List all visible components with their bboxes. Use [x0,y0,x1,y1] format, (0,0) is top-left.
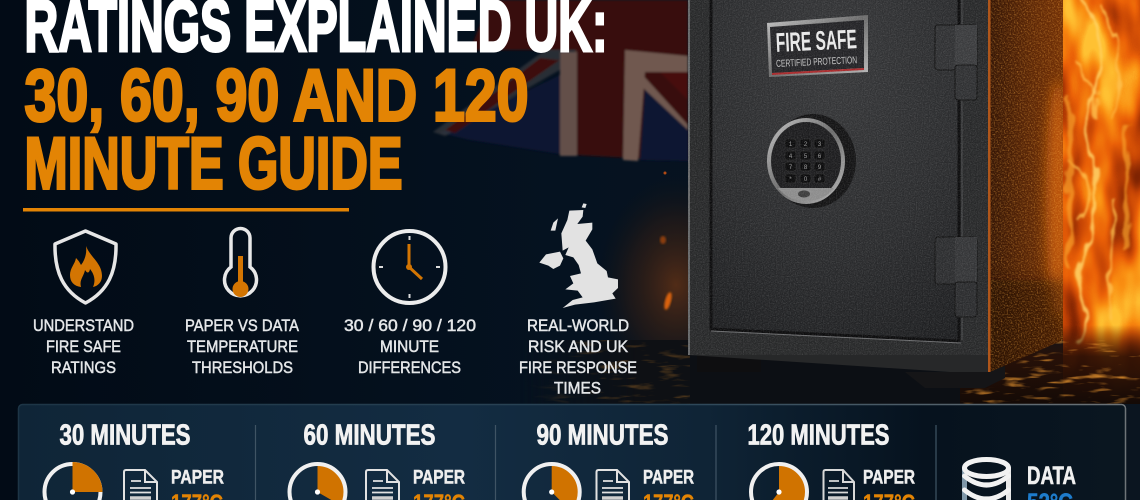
title [24,0,608,204]
keypad digits: # [818,177,822,183]
data threshold [964,460,1076,500]
safe side face [988,0,1070,375]
paper label: PAPER [863,468,915,488]
background: ember floor right of safe [960,325,1140,404]
pie [751,464,807,500]
top hinge [935,25,977,100]
feature label: understand fire safe ratings: FIRE SAFE [46,337,121,356]
data label: DATA [1027,462,1076,490]
safe [688,0,1070,388]
feature label: understand fire safe ratings [33,316,134,377]
icon: clock [374,231,446,303]
background: union flag [433,0,688,161]
paper label: PAPER [171,468,224,488]
background: ember glow behind safe [596,172,756,395]
fire safe badge [767,15,868,77]
paper icon [124,470,157,500]
keypad digits: 5 [804,154,808,160]
panel: rating comparison strip [18,404,1126,500]
feature label: paper vs data temperature thresholds: TEMPERATURE [187,337,298,356]
safe feet [697,354,1005,388]
keypad digits: 2 [804,142,808,148]
feature label: real-world risk [519,316,637,398]
feature label: minute differences: DIFFERENCES [358,358,461,377]
feature label: understand fire safe ratings: RATINGS [51,358,116,377]
paper icon [596,470,629,500]
feature label: understand fire safe ratings: UNDERSTAND [33,316,134,335]
feature label: minute differences: 30 / 60 / 90 / 120 [344,316,476,335]
bottom hinge [935,237,977,317]
icon: thermometer [225,228,256,297]
keypad digits: 0 [804,177,808,183]
badge title: FIRE SAFE [775,24,857,58]
pie [524,464,580,500]
paper icon [366,470,399,500]
background: dark floor left of safe [542,340,960,404]
feature label: paper vs data temperature thresholds: PAPER VS DATA [185,316,300,335]
safe door [712,0,958,340]
keypad digits: 6 [818,154,822,160]
feature label: real-world risk: RISK AND UK [528,337,629,356]
safe door grooves [689,0,962,355]
keypad digits: 4 [789,154,793,160]
feature label: minute differences: MINUTE [380,337,439,356]
keypad digits [789,142,822,183]
pie [44,462,102,500]
safe body frame [688,0,988,372]
keypad digits: 7 [789,165,793,171]
paper label: PAPER [643,468,694,488]
title line 2: 30, 60, 90 AND 120 [24,54,528,136]
feature label: real-world risk: FIRE RESPONSE [519,358,637,377]
rating: 120 minutes [748,420,915,500]
heading: 90 MINUTES [536,420,668,452]
paper label: PAPER [413,468,465,488]
title underline [23,208,349,212]
keypad digits: 3 [818,142,822,148]
rating: 60 minutes [290,420,465,500]
feature label: real-world risk: TIMES [554,378,601,398]
rating: 90 minutes [524,420,694,500]
keypad digits: 9 [818,165,822,171]
badge subtitle: CERTIFIED PROTECTION [776,55,857,70]
pie [290,464,346,500]
heading: 120 MINUTES [748,420,890,452]
feature label: minute differences [344,316,476,377]
icon: shield with flame [55,231,116,303]
safe grain overlay [688,0,988,355]
fire on right of safe [1063,0,1140,400]
feature label: paper vs data temperature thresholds [185,316,300,377]
icon: UK map [539,203,618,308]
title line 3: MINUTE GUIDE [24,122,403,204]
paper icon [824,470,854,500]
keypad digits: 1 [789,142,793,148]
heading: 30 MINUTES [60,420,190,452]
heading: 60 MINUTES [304,420,436,452]
feature label: real-world risk: REAL-WORLD [527,316,629,335]
feature label: paper vs data temperature thresholds: THRESHOLDS [192,358,293,377]
keypad digits: 8 [804,165,808,171]
icon: database [964,460,1008,500]
keypad lock [767,114,856,208]
keypad digits: * [789,177,792,183]
rating: 30 minutes [44,420,224,500]
keypad buttons [785,139,825,183]
